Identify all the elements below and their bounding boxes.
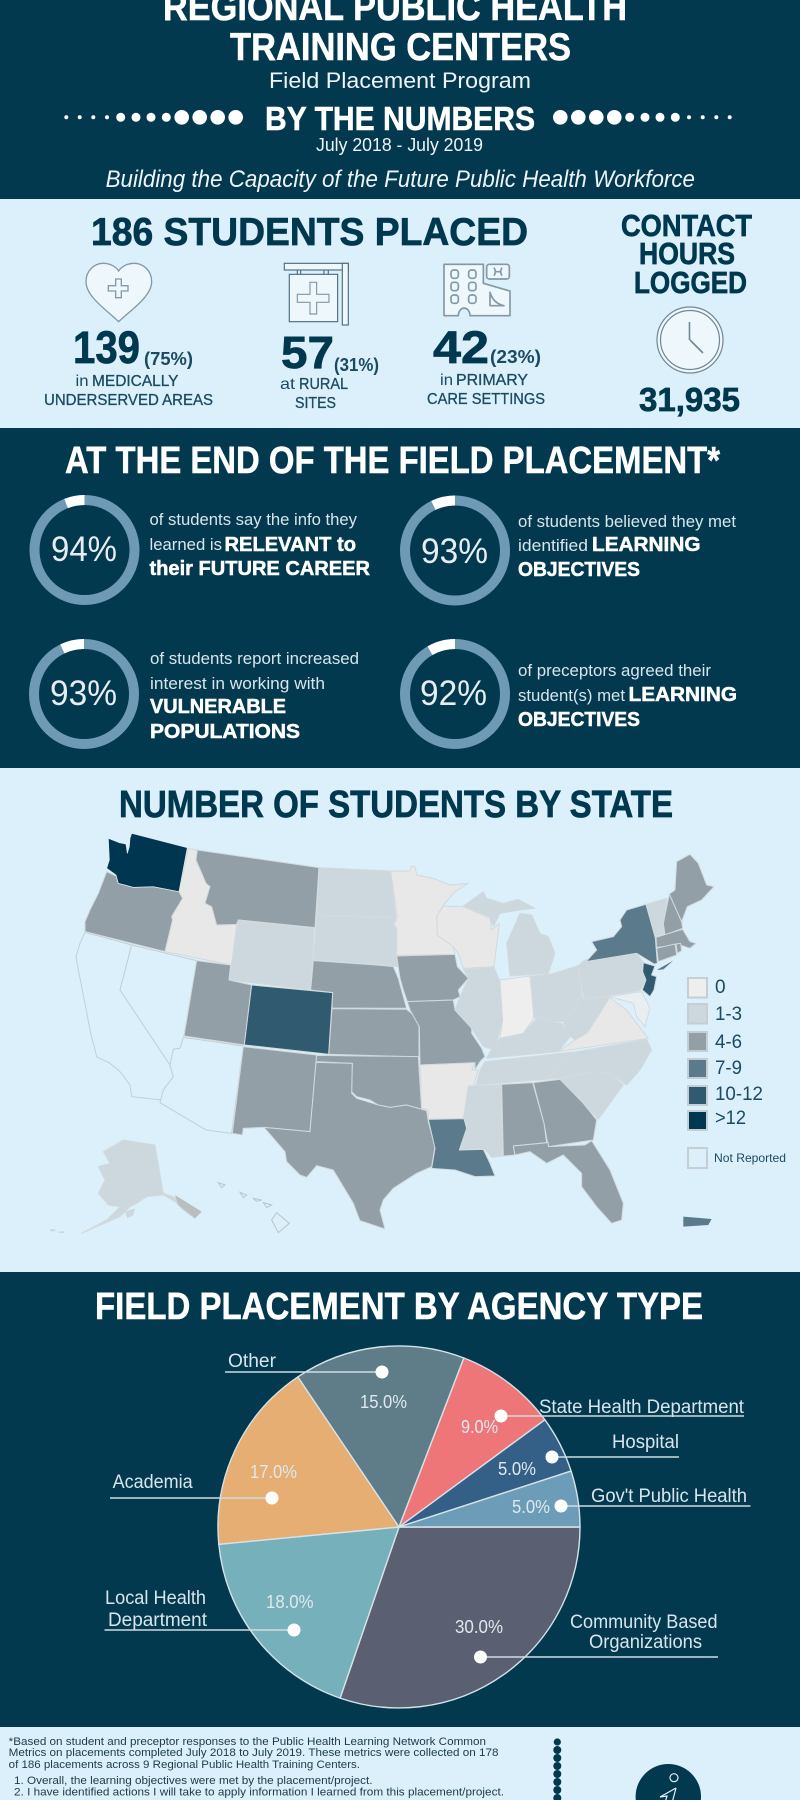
stat: medically underserved	[44, 322, 213, 409]
callout: students met objectives: OBJECTIVES	[518, 559, 640, 581]
stat: primary care: (23%)	[490, 347, 541, 367]
leader: other: Other	[228, 1351, 277, 1372]
icon: person in circle	[636, 1764, 701, 1800]
callout: vulnerable populations: VULNERABLE	[150, 696, 286, 718]
pie value labels: 5.0%	[512, 1497, 550, 1517]
heading: contact hours: HOURS	[639, 236, 735, 271]
heading: AT THE END OF THE FIELD PLACEMENT*	[65, 440, 720, 482]
by the numbers heading: BY THE NUMBERS	[265, 101, 535, 138]
stat: medically underserved: MEDICALLY	[92, 373, 179, 390]
stat: primary care: PRIMARY	[456, 372, 528, 389]
map: central and eastern states	[391, 854, 714, 1070]
heading: students placed: 186 STUDENTS PLACED	[91, 211, 528, 254]
icon: clinic building	[444, 264, 510, 316]
leader: community based organizations: Organizations	[589, 1632, 702, 1653]
stat: rural sites: RURAL	[299, 376, 348, 393]
stat: rural sites: (31%)	[334, 355, 379, 375]
callout: vulnerable populations: interest in working with	[150, 674, 325, 693]
legend: 1-3	[715, 1004, 742, 1025]
ring chart: 93% vulnerable: 93%	[50, 674, 117, 713]
tagline: Building the Capacity of the Future Public Health Workforce	[106, 166, 695, 193]
stat: medically underserved: UNDERSERVED AREAS	[44, 392, 213, 409]
callout: preceptors agreed	[518, 661, 737, 731]
callout: preceptors agreed: student(s) met	[518, 686, 625, 705]
heading: contact hours: CONTACT	[621, 208, 752, 243]
pie value labels: 9.0%	[461, 1417, 498, 1437]
stat: medically underserved: in	[76, 373, 88, 390]
stat: contact hours: 31,935	[639, 381, 740, 418]
callout: relevant to future career: RELEVANT to	[224, 534, 356, 556]
legend: >12	[715, 1108, 746, 1129]
footnote text: *Based on student and preceptor responses to the Public Health Learning Network Common	[9, 1736, 486, 1748]
leader: local health department	[104, 1588, 300, 1636]
stat: rural sites	[280, 327, 379, 412]
callout: preceptors agreed: of preceptors agreed their	[518, 661, 711, 680]
leader: hospital: Hospital	[612, 1432, 679, 1453]
stat: primary care	[427, 322, 545, 408]
date range: July 2018 - July 2019	[316, 135, 483, 155]
callout: vulnerable populations: of students report increased	[150, 649, 359, 668]
panel: end of field placement	[0, 428, 800, 768]
heading: NUMBER OF STUDENTS BY STATE	[119, 784, 673, 826]
icon: hanging medical sign	[284, 263, 348, 325]
heading: contact hours	[621, 208, 752, 300]
leader: state health department: State Health Department	[539, 1397, 745, 1418]
legend	[688, 977, 786, 1168]
leader: community based organizations: Community Based	[570, 1612, 718, 1633]
footnote text: 1. Overall, the learning objectives were met by the placement/project.	[14, 1775, 372, 1787]
callout: vulnerable populations: POPULATIONS	[150, 721, 300, 743]
pie value labels: 17.0%	[250, 1462, 297, 1482]
ring chart: 93% objectives	[405, 500, 505, 600]
leader: government public health: Gov't Public Health	[591, 1486, 747, 1507]
leader: local health department: Local Health	[105, 1588, 206, 1609]
callout: relevant to future career	[150, 510, 371, 580]
legend: 10-12	[715, 1084, 763, 1105]
title: TRAINING CENTERS	[230, 26, 571, 69]
callout: students met objectives	[518, 512, 736, 581]
legend: 0	[715, 977, 726, 998]
pie value labels: 18.0%	[266, 1592, 314, 1612]
leader: academia: Academia	[113, 1472, 193, 1493]
pie value labels: 15.0%	[360, 1392, 407, 1412]
icon: clock	[657, 307, 723, 373]
callout: preceptors agreed: LEARNING	[628, 684, 737, 706]
dotted ornament left	[64, 110, 243, 125]
heading: FIELD PLACEMENT BY AGENCY TYPE	[95, 1286, 703, 1328]
heading: contact hours: LOGGED	[634, 265, 747, 300]
map: southwest and pacific	[50, 1037, 435, 1233]
leader: hospital	[546, 1432, 679, 1464]
panel: students by state	[0, 768, 800, 1272]
leader: government public health	[554, 1486, 750, 1512]
leader: academia	[110, 1472, 278, 1504]
leader: state health department	[494, 1397, 745, 1422]
ring chart: 94%: 94%	[51, 530, 117, 569]
icon: heart with cross	[86, 263, 152, 322]
callout: students met objectives: identified	[518, 536, 588, 555]
stat: rural sites: at	[280, 376, 296, 393]
stat: medically underserved: (75%)	[144, 349, 193, 369]
callout: relevant to future career: of students say the info they	[150, 510, 357, 529]
footnote text: 2. I have identified actions I will take to apply information I learned from this placement/project.	[14, 1787, 504, 1799]
stat: rural sites: SITES	[295, 395, 336, 412]
leader: other	[225, 1351, 388, 1378]
ring chart: 92%	[405, 644, 505, 744]
callout: students met objectives: of students believed they met	[518, 512, 736, 531]
stat: rural sites: 57	[281, 327, 334, 378]
title	[163, 0, 627, 69]
stat: medically underserved: 139	[73, 322, 140, 373]
leader: local health department: Department	[108, 1610, 208, 1631]
leader: community based organizations	[474, 1612, 718, 1664]
panel: header	[0, 0, 800, 199]
callout: relevant to future career: their FUTURE CAREER	[150, 558, 371, 580]
ring chart: 93% objectives: 93%	[421, 532, 488, 571]
dotted divider	[553, 1738, 561, 1800]
callout: relevant to future career: learned is	[150, 535, 222, 554]
callout: vulnerable populations	[150, 649, 359, 743]
map: southern states	[420, 1039, 712, 1227]
stat: primary care: CARE SETTINGS	[427, 391, 545, 408]
pie value labels: 30.0%	[455, 1617, 503, 1637]
ring chart: 92%: 92%	[420, 674, 487, 713]
stat: primary care: 42	[433, 322, 489, 373]
footnote text: of 186 placements across 9 Regional Public Health Training Centers.	[9, 1759, 360, 1771]
dotted ornament right	[553, 110, 732, 125]
stat: primary care: in	[440, 372, 453, 389]
legend: Not Reported	[714, 1151, 786, 1165]
callout: students met objectives: LEARNING	[592, 534, 700, 556]
panel: footnotes	[0, 1727, 800, 1800]
ring chart: 93% vulnerable	[34, 644, 134, 744]
pie value labels	[250, 1392, 550, 1637]
map: western states	[76, 833, 419, 1100]
ring chart: 94%	[34, 500, 134, 600]
pie value labels: 5.0%	[498, 1459, 536, 1479]
footnote text: Metrics on placements completed July 2018 to July 2019. These metrics were collected on 178	[9, 1747, 498, 1759]
callout: preceptors agreed: OBJECTIVES	[518, 709, 640, 731]
panel: students placed	[0, 199, 800, 428]
pie chart	[218, 1346, 580, 1708]
panel: field placement by agency type	[0, 1272, 800, 1727]
subtitle: Field Placement Program	[269, 68, 531, 93]
legend: 7-9	[715, 1058, 742, 1079]
footnote text	[9, 1736, 504, 1799]
legend: 4-6	[715, 1032, 742, 1053]
